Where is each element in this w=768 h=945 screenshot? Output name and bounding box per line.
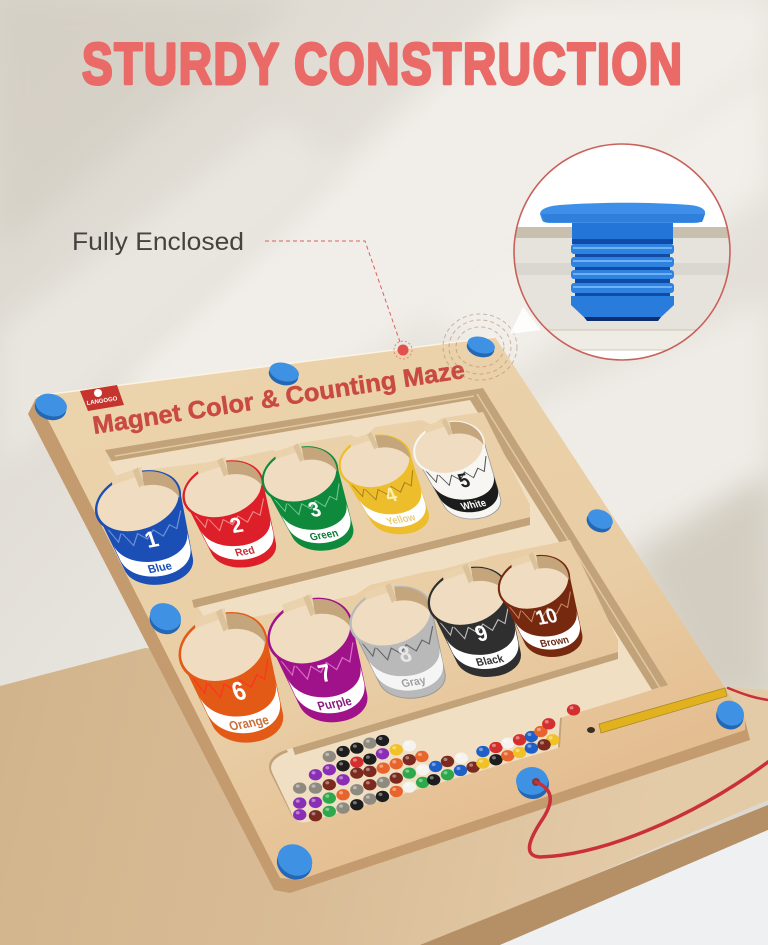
paint can 3 green xyxy=(243,438,376,557)
logo badge: LANGOGO xyxy=(86,396,118,407)
paint can 6 orange: 6 xyxy=(228,677,250,707)
zoom beam xyxy=(510,307,541,334)
paint can 9 black xyxy=(409,558,544,683)
board side thickness xyxy=(28,398,750,893)
blue peg with cord xyxy=(516,767,549,799)
paint can 8 gray: Gray xyxy=(400,674,428,690)
marker dot xyxy=(394,341,412,359)
red cord xyxy=(529,688,768,857)
lens ring xyxy=(514,144,730,360)
cross-section of blue peg xyxy=(540,203,705,321)
paint can 2 red xyxy=(164,452,300,574)
paint can 4 yellow xyxy=(319,427,451,540)
paint can 8 gray xyxy=(331,577,470,706)
paint can 3 green: 3 xyxy=(305,498,325,522)
paint can 4 yellow: Yellow xyxy=(385,512,418,528)
paint can 6 orange xyxy=(158,602,309,750)
callout leader line xyxy=(265,241,400,342)
paint can 7 purple: Purple xyxy=(315,693,354,714)
callout label: Fully Enclosed: Fully Enclosed xyxy=(72,228,244,256)
paint can 8 gray: 8 xyxy=(395,641,415,667)
wooden maze board xyxy=(28,334,750,893)
paint can 5 white: 5 xyxy=(455,469,474,493)
top can island xyxy=(100,412,530,608)
blue peg left xyxy=(144,598,186,639)
paint can 3 green: Green xyxy=(308,528,340,544)
magnetic wand slot xyxy=(587,688,727,733)
lens contents xyxy=(510,140,735,365)
paint can 1 blue: 1 xyxy=(141,526,162,553)
paint can 9 black: Black xyxy=(474,653,506,669)
magnified peg callout xyxy=(510,140,735,365)
paint can 10 brown xyxy=(481,547,604,663)
paint can 9 black: 9 xyxy=(471,620,491,646)
blue peg top-middle xyxy=(266,359,301,388)
table top xyxy=(0,648,768,945)
paint can 7 purple: 7 xyxy=(315,660,336,688)
paint can 10 brown: Brown xyxy=(539,635,571,650)
title: STURDY CONSTRUCTION xyxy=(82,32,682,97)
magnetic beads xyxy=(293,704,580,821)
paint can 4 yellow: 4 xyxy=(381,484,401,507)
blue peg top-left xyxy=(32,390,70,424)
blue peg bottom-right xyxy=(710,696,749,734)
blue peg top-right xyxy=(465,334,497,360)
board heading: Magnet Color & Counting Maze xyxy=(91,356,467,440)
dashed rings around peg xyxy=(443,314,517,380)
paint can 1 blue xyxy=(76,461,218,593)
paint can 5 white: White xyxy=(459,498,489,513)
paint can 1 blue: Blue xyxy=(146,560,174,576)
paint can 6 orange: Orange xyxy=(227,713,271,734)
bottom can island xyxy=(170,540,618,755)
blue peg right xyxy=(583,505,616,536)
board edge highlight xyxy=(36,337,495,396)
blue peg bottom-left xyxy=(270,838,319,886)
logo badge xyxy=(80,385,124,411)
paint can 2 red: Red xyxy=(233,544,257,559)
board face xyxy=(36,337,745,880)
paint can 7 purple xyxy=(247,588,392,730)
paint can 2 red: 2 xyxy=(227,513,246,538)
recessed maze track xyxy=(105,388,668,823)
paint can 10 brown: 10 xyxy=(533,605,561,630)
paint can 5 white xyxy=(395,413,523,525)
